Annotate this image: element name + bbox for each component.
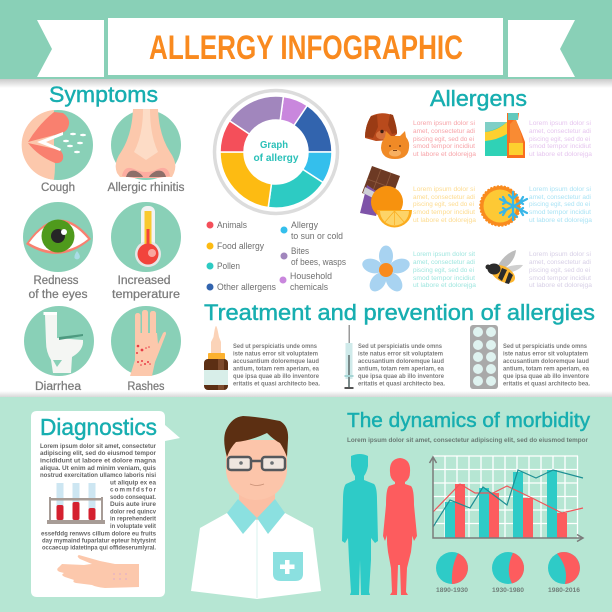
- segment: animals: [220, 121, 250, 152]
- text: treatment 1: que ipsa quae ab illo inventore: [233, 374, 320, 380]
- text: treatment 3: que ipsa quae ab illo inventore: [503, 374, 590, 380]
- heading: diagnostics: Diagnostics: [40, 414, 157, 440]
- text: animals: Lorem ipsum dolor si: [413, 120, 476, 127]
- text: sun: Lorem ipsum dolor si: [529, 186, 592, 193]
- segment: pollen: [268, 169, 323, 208]
- label: cough: Cough: [41, 182, 75, 194]
- icon: flower: [360, 246, 412, 295]
- illustration: doctor: [191, 416, 321, 599]
- doctor pocket: [273, 552, 303, 581]
- text: treatment 3: Sed ut perspiciatis unde omns: [503, 344, 588, 350]
- heading: symptoms: Symptoms: [49, 82, 158, 107]
- text: food: ut labore et dolorejga: [413, 217, 476, 224]
- silhouette: woman: [383, 458, 417, 595]
- text: pollen: ut labore et dolorejga: [413, 282, 476, 289]
- legend: household: Household: [290, 271, 332, 281]
- text: sun: smod tempor incidiut: [529, 209, 591, 216]
- text: food: Lorem ipsum dolor si: [413, 186, 476, 193]
- chart: bars and lines: [430, 456, 583, 542]
- text: treatment 3: accusantium doloremque laud: [503, 359, 589, 365]
- text: bites: amet, consectetur adi: [529, 259, 592, 266]
- legend: sun or cold: to sun or cold: [291, 231, 343, 241]
- text: treatment 2: [358, 344, 445, 388]
- text: treatment 2: que ipsa quae ab illo inventore: [358, 374, 445, 380]
- donut label: [254, 139, 299, 164]
- legend: animals: Animals: [217, 220, 247, 230]
- legend: sun or cold: Allergy: [291, 220, 318, 230]
- icon: cough: [22, 110, 93, 180]
- legend: bites: Bites: [291, 246, 309, 256]
- text: food: amet, consectetur adi: [413, 194, 476, 201]
- text: food: smod tempor incidiut: [413, 209, 475, 216]
- text: diagnostics body: in reprehenderit: [110, 516, 156, 522]
- icon: thermometer: [111, 202, 181, 272]
- text: treatment 2: eritatis et quasi architecto bea.: [358, 382, 445, 388]
- text: sun: [529, 186, 592, 224]
- chart: graph of allergy donut: [214, 90, 338, 214]
- panel: dynamics of morbidity: [342, 410, 590, 595]
- text: sun: ut labore et dolorejga: [529, 217, 592, 224]
- text: household: ut labore et dolorejga: [529, 151, 592, 158]
- donut label: of allergy: [254, 152, 299, 164]
- icon: syringe: [344, 325, 354, 389]
- text: diagnostics body: commfdsfor: [110, 486, 157, 494]
- text: bites: Lorem ipsum dolor si: [529, 251, 592, 258]
- label: redness of the eyes: of the eyes: [28, 289, 88, 301]
- segment: other allergens: [294, 106, 332, 152]
- text: household: piscing egit, sed do ei: [529, 136, 591, 143]
- label: rashes: Rashes: [128, 381, 165, 393]
- text: food: piscing egit, sed do ei: [413, 201, 475, 208]
- doctor hair: [224, 416, 288, 457]
- heading: dynamics: The dynamics of morbidity: [347, 410, 590, 432]
- text: treatment 1: eritatis et quasi architecto bea.: [233, 382, 320, 388]
- text: animals: smod tempor incidiut: [413, 143, 475, 150]
- label: increased temperature: temperature: [112, 289, 180, 301]
- doctor glasses: [228, 457, 285, 470]
- subheading: Lorem ipsum dolor sit amet, consectetur adipiscing elit, sed do eiusmod tempor: [347, 437, 588, 444]
- label: allergic rhinitis: Allergic rhinitis: [108, 182, 185, 194]
- icon: chocolate and orange: [360, 166, 412, 228]
- text: diagnostics body: occaecup idatetinpa qui offideserumlyral.: [42, 544, 156, 552]
- header band: [0, 0, 612, 88]
- doctor coat: [191, 513, 321, 599]
- text: treatment 2: antium, totam rem aperiam, ea: [358, 366, 445, 372]
- pie: 1930-1980: [492, 552, 525, 594]
- icon: sun and snowflake: [480, 186, 527, 226]
- lower section background: [0, 391, 612, 612]
- pie: 1980-2016: 1980-2016: [548, 587, 581, 594]
- icon: allergic rhinitis nose: [111, 109, 181, 180]
- text: animals: piscing egit, sed do ei: [413, 136, 475, 143]
- segment: household chemicals: [280, 96, 307, 126]
- text: treatment 1: [233, 344, 320, 388]
- label: redness of the eyes: Redness: [34, 275, 79, 287]
- text: animals: amet, consectetur adi: [413, 128, 476, 135]
- text: pollen: amet, consectetur adi: [413, 259, 476, 266]
- icon: arm with allergy test: [57, 555, 139, 588]
- label: increased temperature: Increased: [118, 275, 170, 287]
- text: diagnostics body: [40, 443, 157, 552]
- text: treatment 2: accusantium doloremque laud: [358, 359, 444, 365]
- pie: 1930-1980: 1930-1980: [492, 587, 525, 594]
- pie: 1890-1930: [436, 552, 469, 594]
- text: diagnostics body: Lorem ipsum dolor sit amet, consectetur: [40, 443, 157, 450]
- segment: food allergy: [220, 152, 272, 208]
- text: pollen: Lorem ipsum dolor sit: [413, 251, 475, 258]
- label: increased temperature: [112, 275, 180, 301]
- text: bites: smod tempor incidiut: [529, 275, 591, 282]
- text: diagnostics body: sodo consequat.: [110, 494, 156, 501]
- doctor mouth: [250, 484, 264, 486]
- legend: [206, 220, 346, 292]
- segment: sun or cold: [303, 152, 332, 182]
- panel: symptoms: [22, 82, 185, 393]
- text: treatment 2: iste natus error sit voluptatem: [358, 352, 443, 358]
- segment: bites: [230, 96, 283, 134]
- panel: diagnostics: [31, 411, 180, 597]
- title: ALLERGY INFOGRAPHIC: [149, 29, 463, 67]
- text: sun: amet, consectetur adi: [529, 194, 592, 201]
- text: diagnostics body: day mymaind fuparlatur epteur htytysint: [42, 538, 156, 544]
- legend: other allergens: Other allergens: [217, 282, 276, 292]
- panel: allergens: [360, 86, 592, 295]
- legend: household: [280, 271, 332, 292]
- text: treatment 3: iste natus error sit voluptatem: [503, 352, 588, 358]
- text: diagnostics body: in voluptate velit: [110, 523, 156, 530]
- text: bites: ut labore et dolorejga: [529, 282, 592, 289]
- heading: treatment: Treatment and prevention of allergies: [204, 300, 595, 325]
- ribbon left flag: [37, 20, 104, 77]
- text: diagnostics body: essefddg renwvs cillum dolore eu fruits: [41, 530, 157, 538]
- legend: food allergy: Food allergy: [217, 241, 264, 251]
- text: pollen: smod tempor incidiut: [413, 275, 475, 282]
- text: bites: piscing egit, sed do ei: [529, 267, 591, 274]
- icon: red eye: [23, 202, 93, 272]
- text: household: [529, 120, 592, 158]
- doctor neck: [239, 488, 275, 520]
- text: household: Lorem ipsum dolor si: [529, 120, 592, 127]
- text: food: [413, 186, 476, 224]
- text: diagnostics body: ut aliquip ex ea: [110, 480, 157, 486]
- icon: spray and detergent: [485, 113, 525, 158]
- text: treatment 3: eritatis et quasi architecto bea.: [503, 382, 590, 388]
- text: animals: ut labore et dolorejga: [413, 151, 476, 158]
- icon: dropper bottle: [204, 326, 228, 390]
- legend: bites: of bees, wasps: [291, 257, 346, 267]
- icon: hand with rash: [111, 306, 181, 376]
- text: animals: [413, 120, 476, 158]
- pie: 1890-1930: 1890-1930: [436, 587, 469, 594]
- doctor head: [226, 440, 287, 500]
- icon: test tubes in rack: [47, 483, 105, 524]
- pie: 1980-2016: [548, 552, 581, 594]
- text: diagnostics body: adipiscing elit, sed do eiusmod tempor: [40, 450, 157, 457]
- text: household: amet, consectetur adi: [529, 128, 592, 135]
- text: sun: piscing egit, sed do ei: [529, 201, 591, 208]
- doctor collar: [227, 499, 285, 534]
- silhouette: man: [342, 454, 378, 595]
- text: treatment 2: Sed ut perspiciatis unde omns: [358, 344, 443, 350]
- legend: household: chemicals: [290, 282, 328, 292]
- legend: sun or cold: [280, 220, 343, 241]
- text: diagnostics body: nostrud exercitation ullamco laboris nisi: [40, 472, 156, 479]
- legend: bites: [280, 246, 346, 267]
- text: treatment 3: [503, 344, 590, 388]
- text: bites: [529, 251, 592, 289]
- text: treatment 3: antium, totam rem aperiam, ea: [503, 366, 590, 372]
- text: treatment 1: iste natus error sit voluptatem: [233, 352, 318, 358]
- donut label: Graph: [260, 139, 288, 151]
- label: diarrhea: Diarrhea: [35, 381, 82, 393]
- icon: toilet: [24, 306, 94, 376]
- icon: bee: [486, 250, 523, 287]
- panel: treatment and prevention: [204, 300, 595, 390]
- ribbon right flag: [508, 20, 575, 77]
- label: redness of the eyes: [28, 275, 88, 301]
- text: treatment 1: Sed ut perspiciatis unde omns: [233, 344, 318, 350]
- text: diagnostics body: Duis aute irure: [110, 501, 157, 508]
- legend: pollen: Pollen: [217, 261, 240, 271]
- icon: blister pack: [470, 325, 498, 389]
- text: household: smod tempor incidiut: [529, 143, 591, 150]
- text: treatment 1: antium, totam rem aperiam, ea: [233, 366, 320, 372]
- icon: dog and cat: [365, 113, 409, 159]
- text: diagnostics body: incididunt ut labore et dolore magna: [40, 458, 157, 464]
- text: pollen: piscing egit, sed do ei: [413, 267, 475, 274]
- ribbon centre: [108, 18, 503, 75]
- text: pollen: [413, 251, 476, 289]
- text: treatment 1: accusantium doloremque laud: [233, 359, 319, 365]
- heading: allergens: Allergens: [430, 86, 527, 111]
- text: diagnostics body: aliqua. Ut enim ad minim veniam, quis: [40, 465, 157, 472]
- text: diagnostics body: dolor red quincv: [110, 508, 157, 516]
